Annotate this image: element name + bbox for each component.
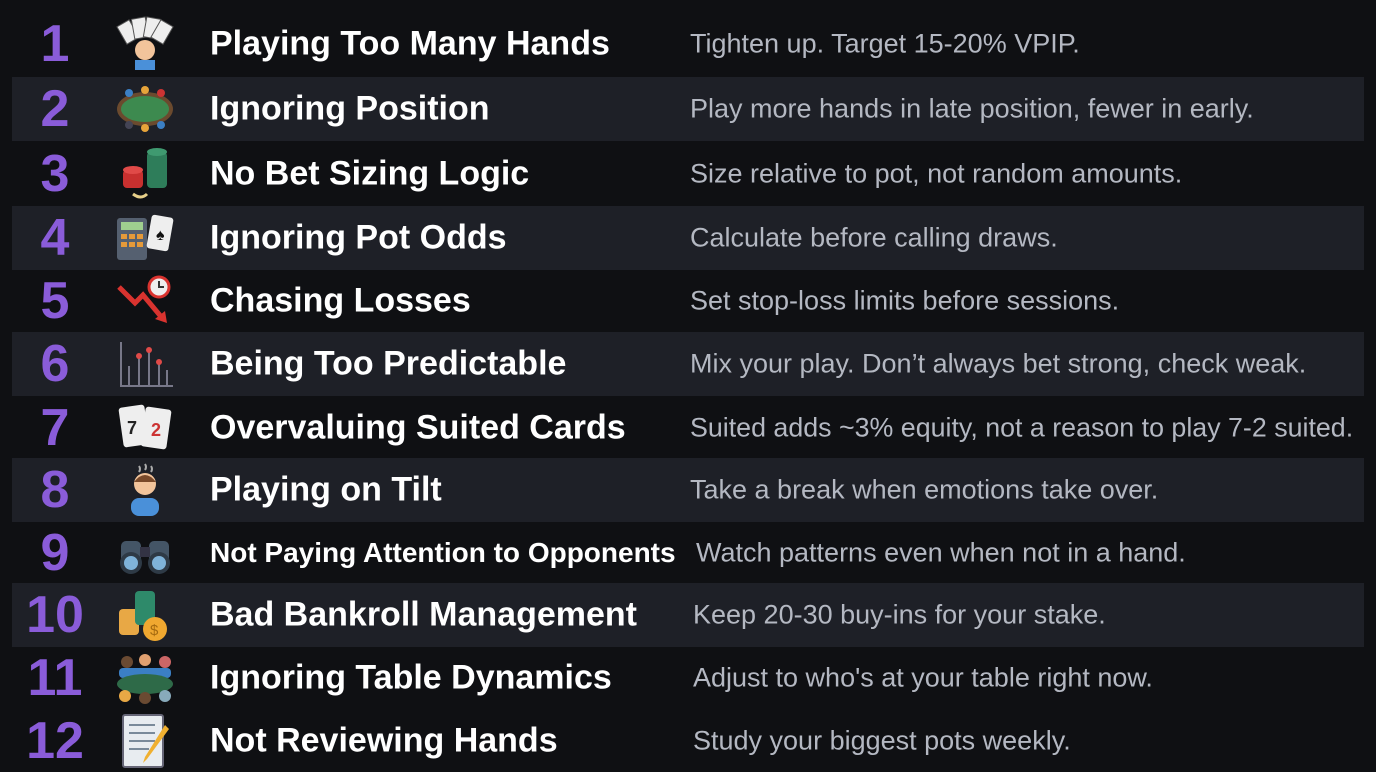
row 5: Set stop-loss limits before sessions. — [690, 285, 1119, 315]
icon: chips — [123, 148, 167, 198]
row 8 — [41, 460, 1158, 518]
row 12: 12 — [26, 712, 84, 770]
row 7: Overvaluing Suited Cards — [210, 408, 626, 446]
icon: falling arrow with clock — [117, 276, 170, 323]
icon: 7-2 cards: 7 — [127, 418, 137, 438]
row 3: Size relative to pot, not random amounts. — [690, 158, 1182, 188]
row 9: 9 — [41, 524, 69, 582]
row 7: Suited adds ~3% equity, not a reason to play 7-2 suited. — [690, 412, 1353, 442]
row 1 — [41, 14, 1080, 72]
icon: coins — [119, 591, 167, 641]
row 6: 6 — [41, 334, 69, 392]
row 3 — [41, 144, 1182, 202]
row 1: Playing Too Many Hands — [210, 24, 610, 62]
row 8: Playing on Tilt — [210, 470, 442, 508]
icon: calculator and card: ♠ — [156, 226, 165, 244]
row 4: Calculate before calling draws. — [690, 222, 1058, 252]
row 6 — [41, 334, 1306, 392]
row 9: Not Paying Attention to Opponents — [210, 536, 676, 568]
row 4: 4 — [41, 208, 69, 266]
row 9: Watch patterns even when not in a hand. — [696, 537, 1186, 567]
row 6: Being Too Predictable — [210, 344, 566, 382]
row 12 — [26, 712, 1071, 770]
row 2 — [41, 80, 1254, 138]
row 10: Bad Bankroll Management — [210, 595, 637, 633]
row 11: 11 — [28, 648, 82, 706]
row 7 — [41, 398, 1353, 456]
row 2: Play more hands in late position, fewer in early. — [690, 93, 1254, 123]
row 9 — [41, 524, 1186, 582]
row 4 — [41, 208, 1058, 266]
row 1: 1 — [41, 14, 69, 72]
row 5 — [41, 272, 1119, 330]
icon: 7-2 cards — [118, 404, 172, 450]
icon: coins: $ — [150, 622, 159, 638]
row 12: Not Reviewing Hands — [210, 721, 558, 759]
row 5: 5 — [41, 272, 69, 330]
row 3: No Bet Sizing Logic — [210, 154, 529, 192]
row 10: 10 — [26, 586, 84, 644]
row 5: Chasing Losses — [210, 281, 471, 319]
row 2: Ignoring Position — [210, 89, 490, 127]
icon: calculator and card — [117, 214, 174, 260]
row 8: Take a break when emotions take over. — [690, 474, 1158, 504]
row 11: Ignoring Table Dynamics — [210, 658, 612, 696]
icon: table with players — [117, 654, 173, 704]
icon: poker table — [117, 86, 173, 132]
row 4: Ignoring Pot Odds — [210, 218, 507, 256]
icon: notepad and pencil — [122, 714, 169, 768]
row 10: Keep 20-30 buy-ins for your stake. — [693, 599, 1106, 629]
row 1: Tighten up. Target 15-20% VPIP. — [690, 28, 1080, 58]
icon: hand of cards — [116, 16, 174, 70]
icon: frustrated person — [131, 464, 159, 516]
icon: 7-2 cards: 2 — [151, 420, 161, 440]
row 8: 8 — [41, 460, 69, 518]
row 11 — [28, 648, 1153, 706]
row 7: 7 — [41, 398, 69, 456]
row 11: Adjust to who's at your table right now. — [693, 662, 1153, 692]
row 12: Study your biggest pots weekly. — [693, 725, 1071, 755]
row 10 — [26, 586, 1106, 644]
row 2: 2 — [41, 80, 69, 138]
icon: lollipop chart — [120, 342, 173, 387]
row 6: Mix your play. Don’t always bet strong, check weak. — [690, 348, 1306, 378]
icon: binoculars — [120, 541, 170, 574]
row 3: 3 — [41, 144, 69, 202]
